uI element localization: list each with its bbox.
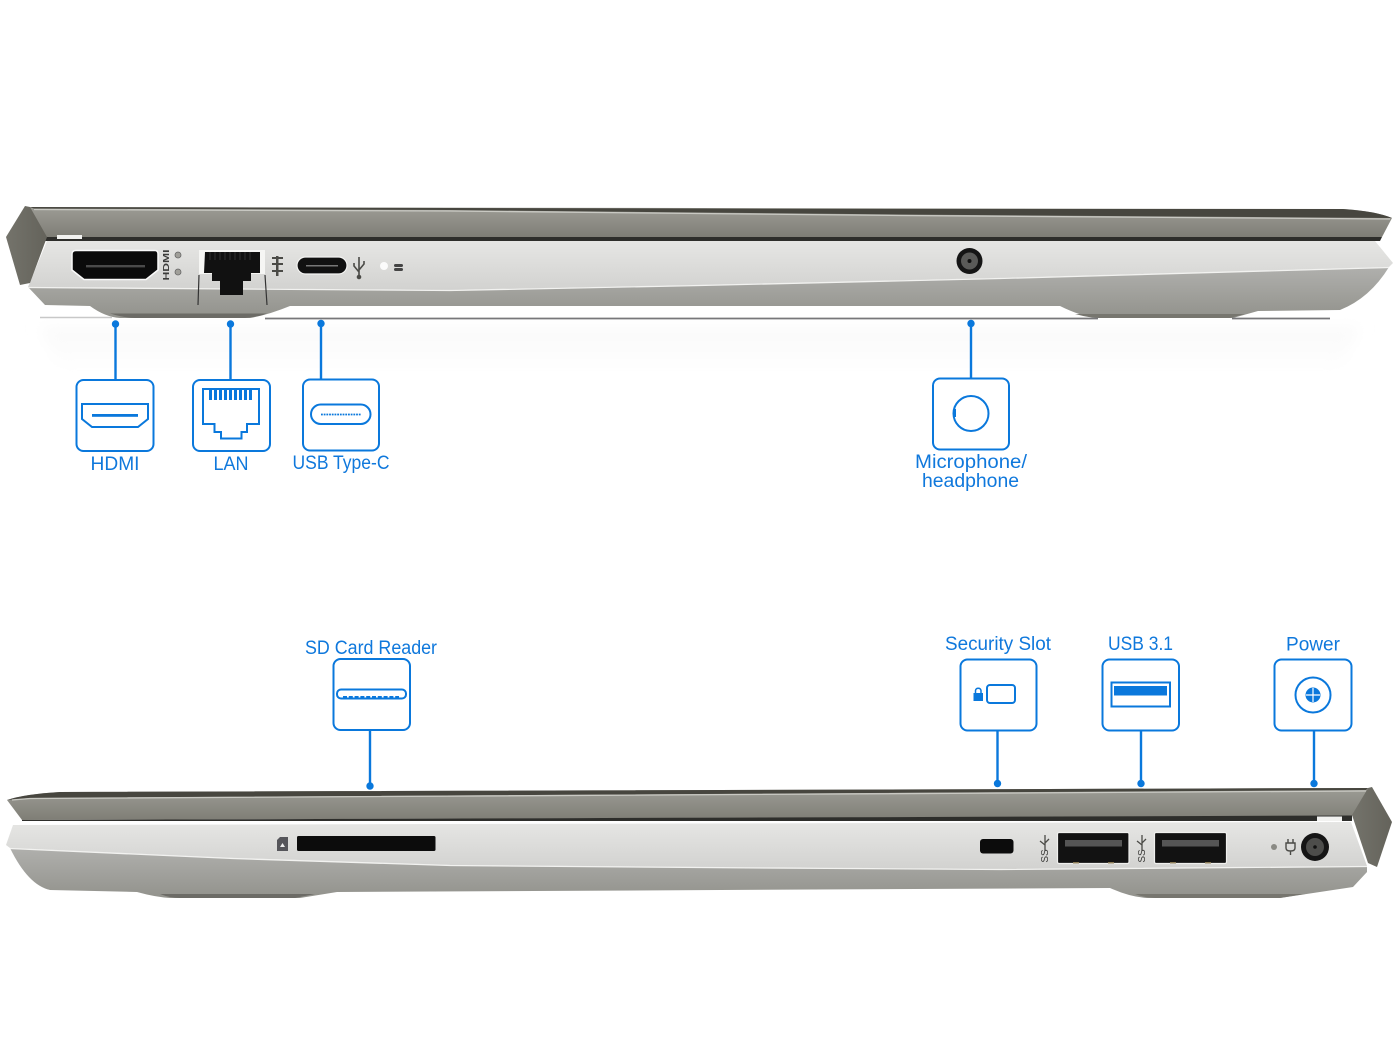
icon: lock and slot — [960, 660, 1036, 730]
label: USB 3.1: USB 3.1 — [1108, 634, 1173, 655]
label: LAN: LAN — [214, 454, 248, 475]
icon: USB-C — [303, 380, 379, 450]
notch — [57, 235, 82, 239]
laptop: top side view — [6, 206, 1393, 318]
underside of base — [28, 267, 1389, 318]
callout: power — [1274, 634, 1352, 730]
callout: USB 3.1 — [1102, 634, 1179, 730]
notch — [1317, 816, 1342, 821]
label: microphone/headphone: headphone — [922, 471, 1019, 492]
HDMI port — [72, 250, 158, 280]
audio jack — [956, 248, 982, 274]
label: USB Type-C: USB Type-C — [292, 453, 390, 474]
lid — [30, 207, 1392, 237]
label: HDMI: HDMI — [90, 454, 140, 475]
connector: LAN — [227, 320, 234, 379]
hinge — [6, 206, 47, 285]
HDMI LEDs — [175, 252, 181, 275]
connector: SD card — [366, 730, 374, 790]
USB port 2 — [1154, 832, 1226, 864]
security slot — [980, 839, 1014, 854]
label: SD card reader: SD Card Reader — [305, 638, 438, 659]
power jack — [1301, 833, 1329, 861]
label: microphone/headphone — [915, 452, 1028, 492]
plug symbol — [1286, 839, 1295, 855]
laptop: bottom side view — [6, 787, 1392, 898]
connector: HDMI — [112, 320, 119, 379]
power LED — [1271, 844, 1277, 850]
underside of base — [10, 848, 1367, 898]
callout: security slot — [945, 634, 1052, 730]
label: security slot: Security Slot — [945, 634, 1052, 655]
label: power: Power — [1286, 634, 1341, 656]
silver base — [6, 822, 1367, 869]
lid — [7, 788, 1368, 820]
icon: audio jack — [933, 378, 1009, 450]
connector: power — [1310, 730, 1318, 787]
USB port 1 — [1058, 832, 1129, 864]
HDMI marking: HDMI — [162, 250, 171, 280]
LAN symbol — [272, 256, 283, 276]
USB symbol 2: SS — [1137, 849, 1148, 863]
drive symbol — [394, 264, 403, 271]
hinge — [1352, 787, 1392, 867]
USB symbol — [354, 257, 364, 278]
connector: USB 3.1 — [1137, 730, 1145, 787]
shadow line — [265, 318, 1330, 320]
callout: HDMI — [76, 380, 154, 475]
connector: microphone — [967, 320, 975, 378]
icon: SD slot — [334, 659, 410, 730]
status LED — [380, 262, 388, 270]
icon: LAN — [193, 380, 270, 451]
icon: USB A — [1102, 660, 1179, 730]
SD slot — [297, 836, 436, 851]
label: microphone/headphone: Microphone/ — [915, 452, 1028, 473]
SD symbol — [277, 837, 288, 851]
callout: LAN — [193, 380, 270, 475]
icon: HDMI — [76, 380, 154, 451]
reflection under top laptop — [40, 326, 1360, 375]
connector: security slot — [994, 730, 1001, 787]
USB symbol 1 — [1040, 835, 1051, 863]
icon: power jack — [1274, 660, 1352, 730]
silver base — [28, 241, 1393, 290]
callout: USB Type-C — [292, 380, 390, 474]
LAN port — [198, 250, 267, 305]
USB symbol 1: SS — [1040, 849, 1051, 863]
callout: microphone/headphone — [915, 378, 1028, 492]
USB symbol 2 — [1137, 835, 1148, 863]
USB-C port — [297, 257, 347, 274]
connector: USB Type-C — [317, 320, 325, 379]
callout: SD card reader — [305, 638, 438, 730]
